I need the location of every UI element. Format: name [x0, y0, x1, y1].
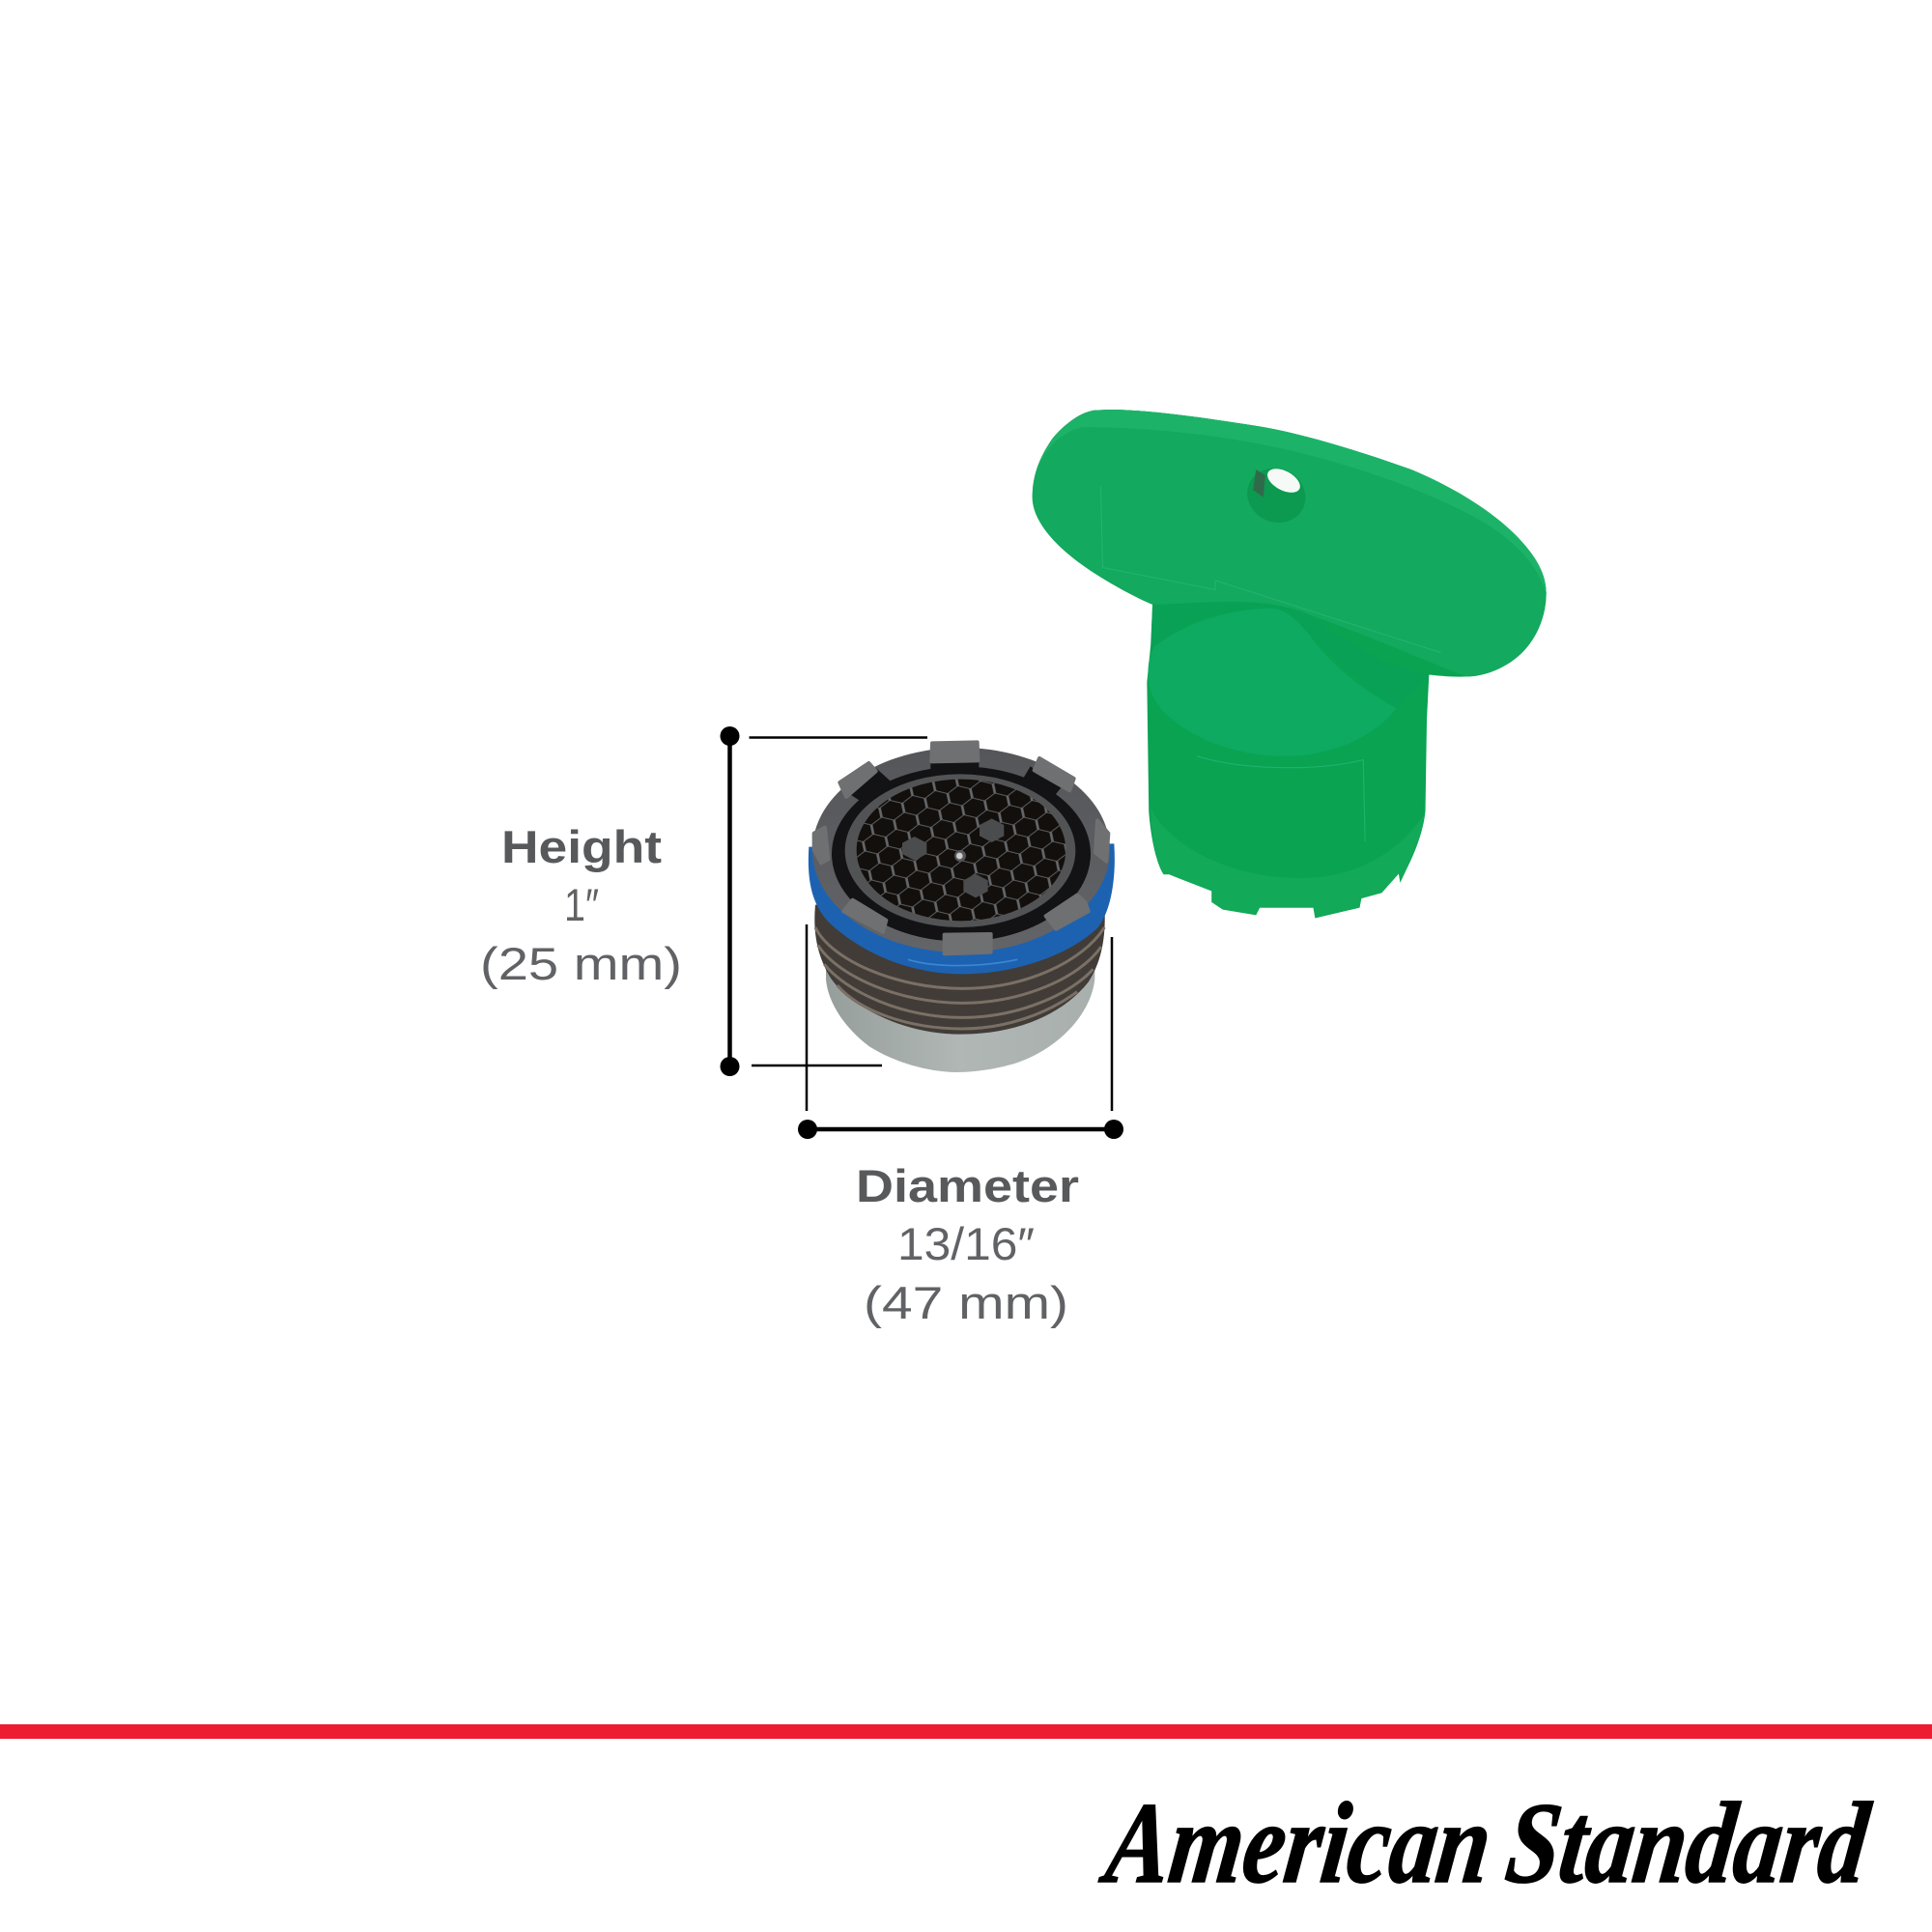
diameter label — [856, 1160, 1079, 1328]
shadow under handle — [1151, 603, 1429, 708]
thread highlights — [815, 927, 1104, 1029]
icon: aerator — [809, 742, 1115, 1072]
height dimension line — [721, 726, 927, 1076]
cap outer wall — [812, 748, 1110, 952]
diameter label: Diameter — [856, 1160, 1079, 1211]
blue o-ring — [809, 843, 1115, 974]
handle top bevel — [1037, 410, 1547, 593]
height label — [480, 821, 682, 989]
inner rim — [845, 774, 1075, 927]
molded seam lines — [1101, 486, 1441, 841]
lower collar band — [1151, 808, 1425, 918]
logo: American Standard — [1094, 1779, 1876, 1908]
mesh solid pads — [902, 818, 1004, 897]
handle face — [1033, 410, 1547, 676]
center pin — [954, 850, 966, 862]
height label: Height — [501, 821, 662, 872]
diameter label: (47 mm) — [864, 1277, 1068, 1328]
diameter label: 13/16″ — [897, 1218, 1035, 1269]
icon: green aerator key — [1033, 410, 1547, 918]
key silhouette — [1033, 410, 1547, 918]
retaining lugs — [814, 742, 1108, 953]
lug notches — [847, 753, 1063, 805]
logo: American Standard: American — [1094, 1779, 1498, 1908]
cone top — [1149, 609, 1397, 756]
diameter dimension line — [798, 924, 1123, 1139]
red divider bar — [0, 1724, 1932, 1739]
black inner channel — [832, 766, 1091, 942]
aerator grey base — [826, 930, 1094, 1072]
threaded body — [814, 905, 1105, 1035]
honeycomb mesh — [856, 779, 1066, 922]
height label: 1″ — [564, 879, 599, 930]
ring highlight — [908, 959, 1017, 966]
key hole — [1238, 459, 1315, 532]
height label: (25 mm) — [480, 938, 682, 989]
